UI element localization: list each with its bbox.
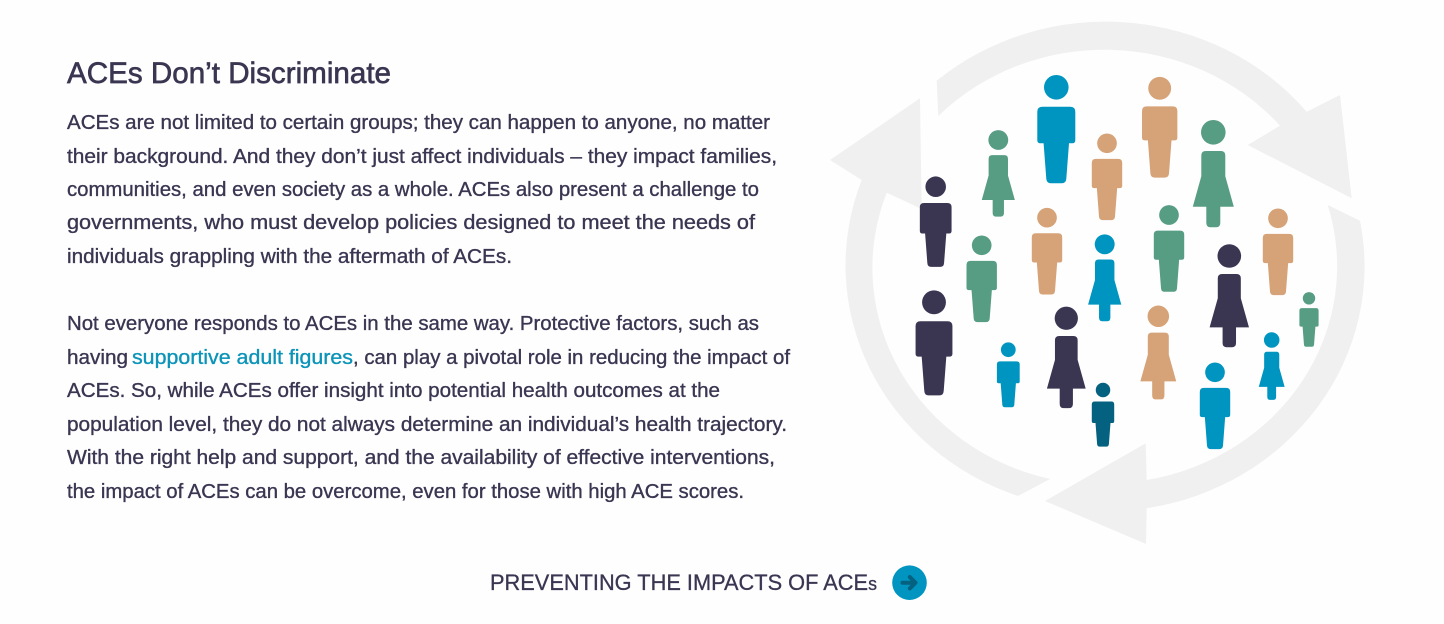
text block: first paragraph: ACEs are not limited to certain groups; they can happen to anyone, no matter [67, 112, 770, 134]
person: green man [1154, 205, 1184, 292]
text block: second paragraph: the impact of ACEs can be overcome, even for those with high ACE scores. [67, 481, 744, 503]
text block: first paragraph: governments, who must develop policies designed to meet the needs of [67, 212, 755, 234]
person: small blue man [997, 342, 1020, 407]
person: navy woman [1210, 244, 1249, 347]
person: large green woman [1193, 120, 1234, 227]
person: blue man [1037, 75, 1075, 183]
link text: PREVENTING THE IMPACTS OF ACEs [490, 570, 877, 595]
person: tan woman [1140, 306, 1176, 399]
text block: second paragraph: , can play a pivotal role in reducing the impact of [353, 347, 790, 369]
person: small dark teal man [1092, 383, 1114, 447]
person: navy woman [1047, 307, 1086, 408]
text block: first paragraph: communities, and even society as a whole. ACEs also present a challenge to [67, 179, 759, 201]
person: tan man [1142, 77, 1177, 178]
circular arrows [830, 22, 1365, 544]
person: blue woman [1088, 234, 1121, 321]
text block: first paragraph: their background. And they don’t just affect individuals – they impact families, [67, 146, 777, 168]
person: green woman [982, 130, 1015, 217]
person: green man [966, 235, 997, 322]
text block: first paragraph [67, 112, 777, 268]
arrow: right to bottom [1045, 205, 1365, 544]
text block: second paragraph [67, 313, 790, 503]
text block: second paragraph: population level, they do not always determine an individual’s health trajectory. [67, 414, 787, 436]
text block: first paragraph: individuals grappling with the aftermath of ACEs. [67, 246, 512, 268]
icon: arrow button [892, 565, 927, 600]
arrow: bottom to left [830, 98, 1050, 496]
arrow: top to right [937, 22, 1352, 198]
person: small blue woman [1259, 332, 1285, 400]
person: small green man [1299, 292, 1319, 347]
text block: second paragraph: having [67, 347, 128, 369]
call to action [490, 565, 927, 600]
person: tan man [1263, 208, 1293, 295]
heading: ACEs Don’t Discriminate [67, 57, 391, 90]
person: navy man [916, 290, 952, 395]
text block: second paragraph: supportive adult figures [132, 347, 353, 369]
crowd of people [916, 75, 1319, 449]
text block: second paragraph: With the right help and support, and the availability of effective interventions, [67, 447, 775, 469]
person: tan man [1092, 133, 1122, 220]
text block: second paragraph: Not everyone responds to ACEs in the same way. Protective factors, such as [67, 313, 759, 335]
person: blue man [1200, 362, 1230, 449]
text block: second paragraph: ACEs. So, while ACEs offer insight into potential health outcomes at the [67, 380, 720, 402]
person: navy man [920, 176, 952, 267]
person: tan man [1032, 208, 1062, 294]
